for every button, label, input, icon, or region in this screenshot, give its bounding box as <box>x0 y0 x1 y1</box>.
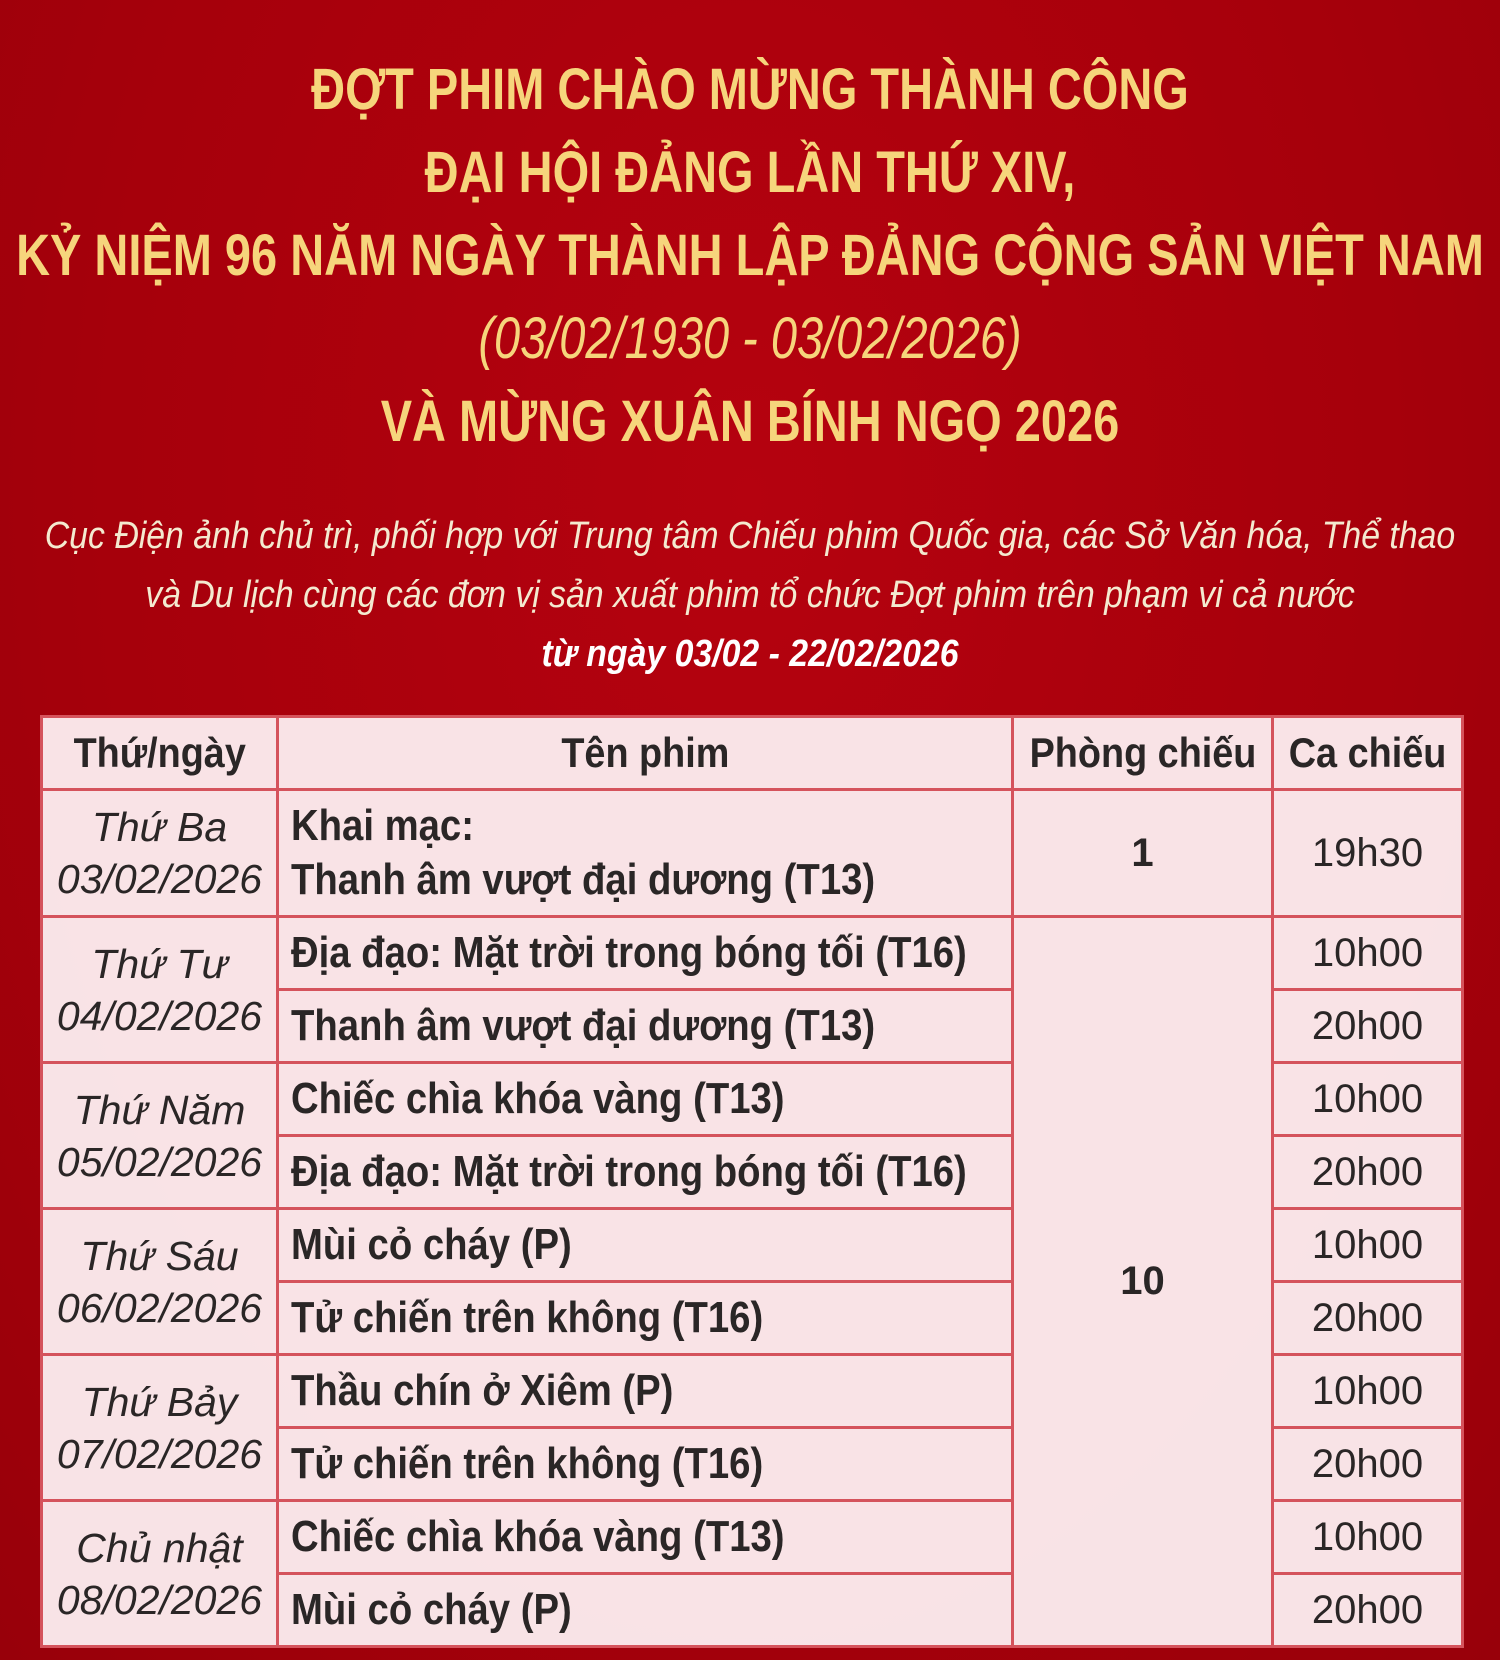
title: (03/02/1930 - 03/02/2026) <box>478 306 1022 371</box>
schedule table: Tên phim <box>561 729 729 776</box>
schedule table: Chiếc chìa khóa vàng (T13) <box>291 1074 785 1123</box>
schedule table: Địa đạo: Mặt trời trong bóng tối (T16) <box>291 1147 967 1196</box>
schedule table: Thứ Năm <box>74 1086 245 1132</box>
schedule table: Thầu chín ở Xiêm (P) <box>291 1366 673 1415</box>
schedule table: 20h00 <box>1312 1004 1423 1048</box>
schedule table: Thứ Ba <box>92 804 227 850</box>
subtitle text: và Du lịch cùng các đơn vị sản xuất phim tổ chức Đợt phim trên phạm vi cả nước <box>145 574 1355 616</box>
schedule table: 20h00 <box>1312 1150 1423 1194</box>
schedule table: 20h00 <box>1312 1296 1423 1340</box>
schedule table: 10h00 <box>1312 1368 1423 1412</box>
title: VÀ MỪNG XUÂN BÍNH NGỌ 2026 <box>381 389 1119 454</box>
schedule table: Ca chiếu <box>1289 729 1446 776</box>
schedule table: 10h00 <box>1312 1514 1423 1558</box>
schedule table: 10h00 <box>1312 1076 1423 1120</box>
schedule table: 07/02/2026 <box>57 1430 262 1476</box>
schedule table: Khai mạc: <box>291 800 474 850</box>
schedule table: Tử chiến trên không (T16) <box>291 1293 763 1342</box>
schedule table: 20h00 <box>1312 1442 1423 1486</box>
schedule table: Phòng chiếu <box>1029 729 1256 776</box>
schedule table: 19h30 <box>1312 830 1423 874</box>
subtitle text: Cục Điện ảnh chủ trì, phối hợp với Trung tâm Chiếu phim Quốc gia, các Sở Văn hóa, Thể thao <box>45 515 1455 557</box>
schedule table: Thanh âm vượt đại dương (T13) <box>291 854 875 904</box>
title: KỶ NIỆM 96 NĂM NGÀY THÀNH LẬP ĐẢNG CỘNG SẢN VIỆT NAM <box>16 223 1484 288</box>
subtitle text: từ ngày 03/02 - 22/02/2026 <box>541 633 959 675</box>
schedule table: 08/02/2026 <box>57 1576 262 1622</box>
schedule table: 04/02/2026 <box>57 992 262 1038</box>
schedule table: Chủ nhật <box>76 1524 243 1570</box>
schedule table: 20h00 <box>1312 1588 1423 1632</box>
schedule table: Tử chiến trên không (T16) <box>291 1439 763 1488</box>
schedule table: Chiếc chìa khóa vàng (T13) <box>291 1512 785 1561</box>
schedule table: Thứ Bảy <box>82 1378 237 1424</box>
schedule table: Địa đạo: Mặt trời trong bóng tối (T16) <box>291 928 967 977</box>
schedule table: Mùi cỏ cháy (P) <box>291 1585 572 1634</box>
title: ĐẠI HỘI ĐẢNG LẦN THỨ XIV, <box>425 140 1075 205</box>
schedule table: Thứ/ngày <box>73 729 246 776</box>
schedule table: 06/02/2026 <box>57 1284 262 1330</box>
schedule table <box>40 715 1464 1648</box>
schedule table: 10h00 <box>1312 1222 1423 1266</box>
schedule table: Mùi cỏ cháy (P) <box>291 1220 572 1269</box>
title: ĐỢT PHIM CHÀO MỪNG THÀNH CÔNG <box>311 57 1189 122</box>
title <box>16 57 1484 454</box>
schedule table: Thứ Tư <box>91 940 228 986</box>
subtitle text <box>45 515 1455 675</box>
schedule table: Thứ Sáu <box>80 1232 239 1278</box>
schedule table: 10h00 <box>1312 930 1423 974</box>
schedule table: 03/02/2026 <box>57 856 262 902</box>
schedule table: Thanh âm vượt đại dương (T13) <box>291 1001 875 1050</box>
schedule table: 1 <box>1131 830 1154 874</box>
schedule table: 10 <box>1120 1259 1165 1303</box>
schedule table: 05/02/2026 <box>57 1138 262 1184</box>
